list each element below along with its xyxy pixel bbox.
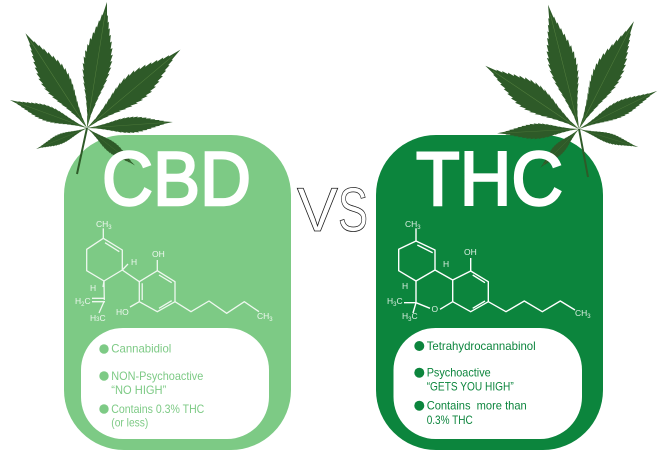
chart: THC molecule: C [396, 296, 403, 306]
chart: THC molecule: CH [575, 308, 587, 318]
chart: THC molecule [387, 219, 591, 323]
bullet: Contains 0.3% THC: (or less) [111, 416, 148, 430]
bullet: Cannabidiol: Cannabidiol [111, 342, 171, 356]
chart: THC molecule: H [443, 259, 449, 269]
text panel: THC facts [394, 328, 582, 439]
bullet: Contains more than 0.3% THC: 0.3% THC [427, 413, 473, 427]
bullet: NON-Psychoactive: “NO HIGH” [111, 383, 166, 397]
chart: CBD molecule: 2 [81, 302, 85, 308]
bullet: Contains more than 0.3% THC [414, 398, 527, 427]
chart: CBD molecule: H3C [90, 313, 106, 323]
chart: CBD molecule: CH [257, 311, 269, 321]
heading: VS outlined: V [297, 176, 339, 245]
chart: THC molecule: 3 [393, 302, 397, 308]
chart: THC molecule: 3 [587, 314, 591, 320]
bullet: NON-Psychoactive: NON-Psychoactive [111, 369, 204, 383]
chart: CBD molecule: OH [152, 249, 165, 259]
panel: THC background [376, 135, 603, 450]
heading: THC: THC [416, 137, 563, 222]
chart: CBD molecule: H [131, 257, 137, 267]
chart: CBD molecule: C [84, 296, 91, 306]
chart: THC molecule: CH [405, 219, 417, 229]
chart: THC molecule: O [432, 304, 438, 314]
chart: THC molecule: H [402, 281, 408, 291]
bullet: Psychoactive: “GETS YOU HIGH” [427, 380, 514, 394]
bullet: Contains 0.3% THC: Contains 0.3% THC [111, 402, 205, 416]
chart: THC molecule: 3 [408, 317, 412, 323]
bullet: Psychoactive: Psychoactive [427, 366, 491, 380]
chart: CBD molecule: CH [96, 219, 108, 229]
chart: THC molecule: H [402, 311, 408, 321]
chart: THC molecule: OH [464, 247, 477, 257]
chart: CBD molecule [75, 219, 273, 323]
text panel: CBD facts [81, 328, 269, 439]
bullet: Tetrahydrocannabinol: Tetrahydrocannabinol [427, 339, 536, 353]
panel: CBD background [64, 135, 291, 450]
heading: CBD: CBD [102, 137, 251, 222]
chart: THC molecule: 3 [417, 225, 421, 231]
heading: VS outlined: S [338, 176, 368, 245]
chart: CBD molecule: HO [116, 307, 129, 317]
icon: cannabis leaf left [7, 0, 190, 174]
chart: CBD molecule: 3 [108, 225, 112, 231]
chart: CBD molecule: H [75, 296, 81, 306]
bullet: Contains 0.3% THC [99, 402, 205, 430]
icon: cannabis leaf right [477, 1, 661, 177]
bullet: NON-Psychoactive [99, 369, 204, 397]
bullet: Psychoactive [414, 366, 514, 394]
chart: THC molecule: C [411, 311, 418, 321]
bullet: Contains more than 0.3% THC: Contains more than [427, 398, 527, 412]
heading: VS outlined [297, 176, 368, 245]
chart: CBD molecule: 3 [269, 317, 273, 323]
chart: THC molecule: H [387, 296, 393, 306]
chart: CBD molecule: H [90, 283, 96, 293]
